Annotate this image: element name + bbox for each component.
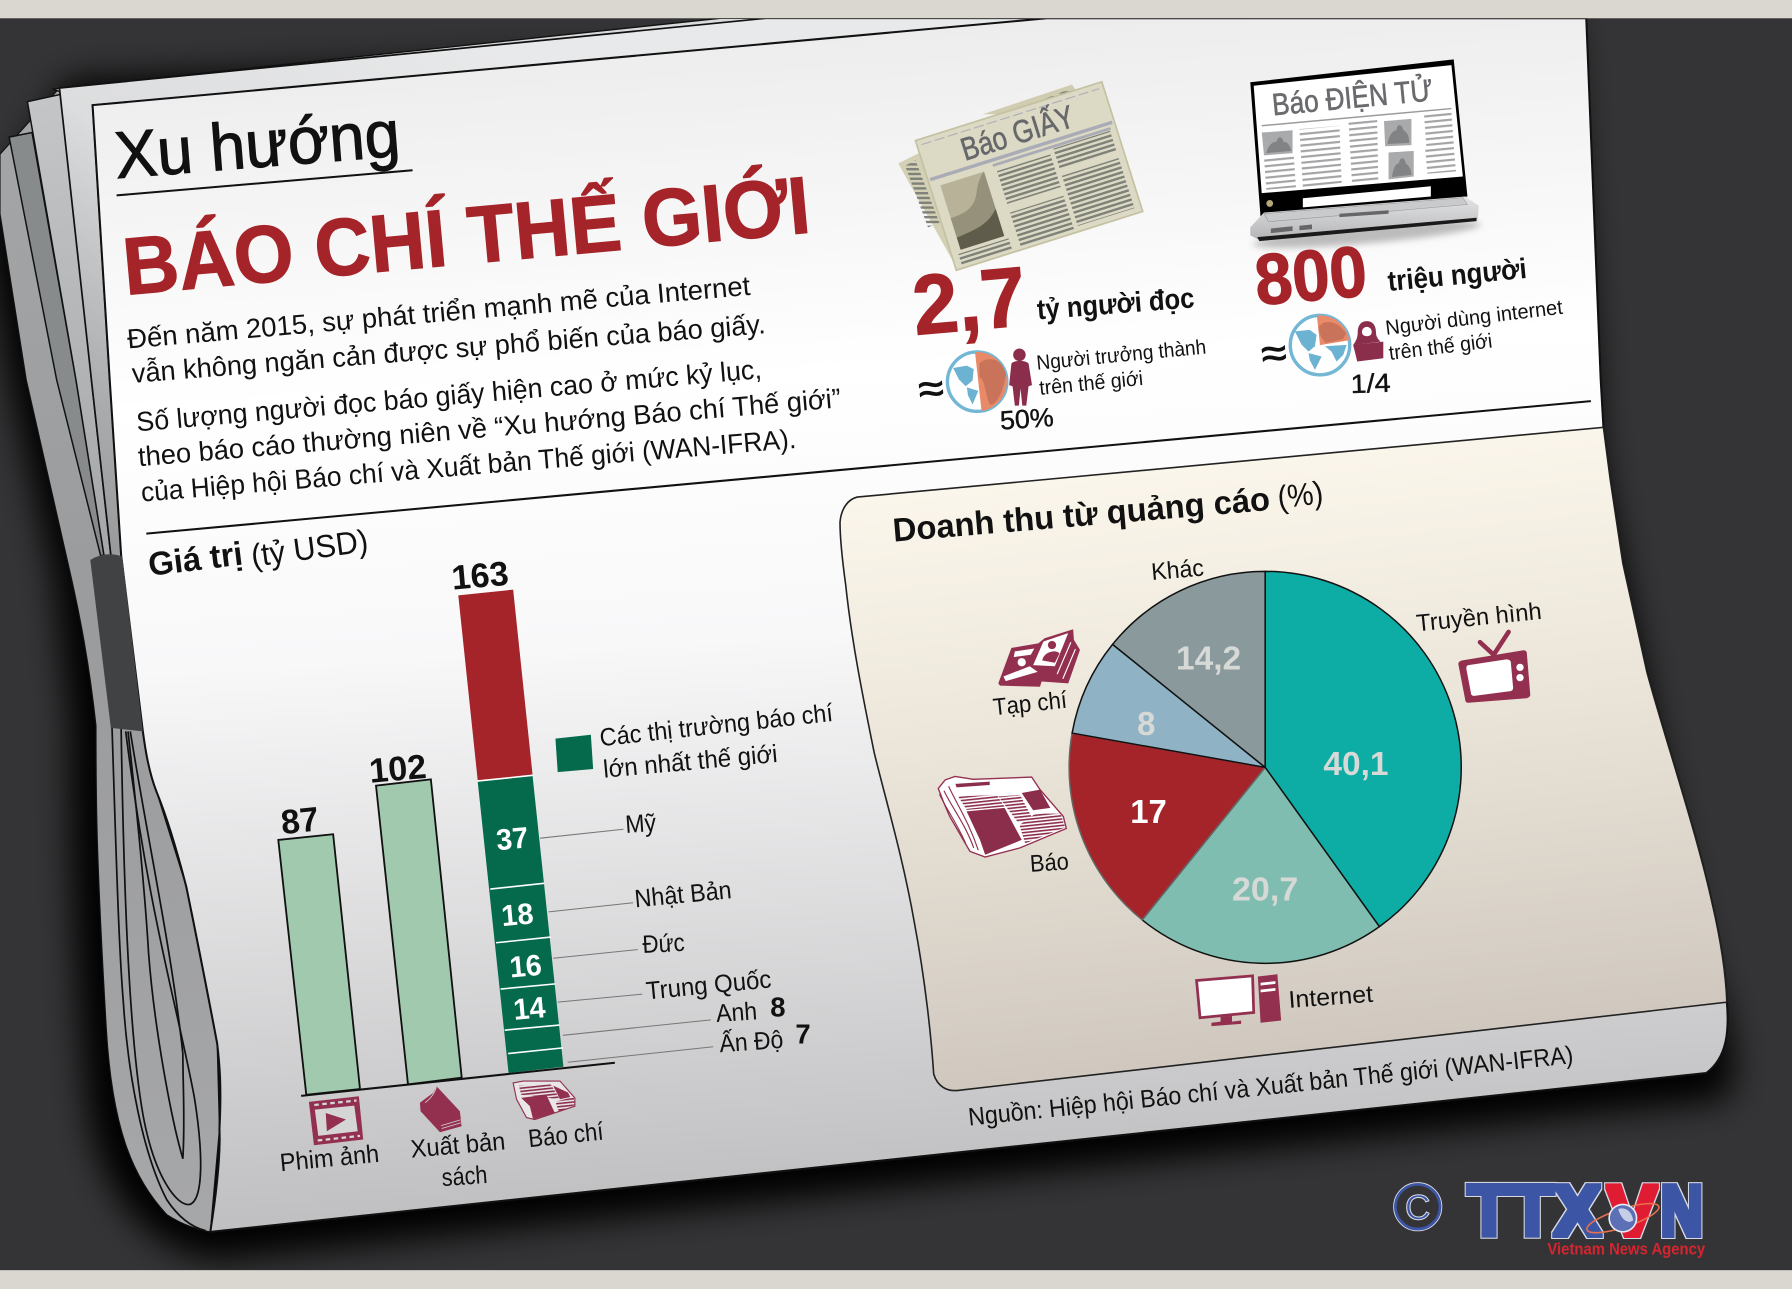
logo: copyright mark: [1394, 1183, 1442, 1231]
icon: book: [420, 1086, 462, 1132]
stat: print readers: ≈: [916, 364, 946, 414]
top band: [0, 0, 1792, 18]
icon: magazines: [998, 629, 1080, 687]
label: Báo GIẤY: Báo GIẤY: [956, 98, 1078, 168]
pie values: 20,7: [1232, 871, 1298, 908]
logo: TTXVN: Vietnam News Agency: [1547, 1240, 1706, 1259]
icon: woman at laptop: [1353, 321, 1383, 362]
icon: desktop computer: [1197, 974, 1281, 1026]
category labels: Phim ảnh: [279, 1140, 380, 1177]
stat: print readers: Người trưởng thành: [1035, 336, 1207, 375]
pie labels: Báo: [1029, 848, 1070, 878]
legend: Các thị trường báo chí: [598, 699, 834, 752]
pie chart: ad revenue: [891, 474, 1543, 1026]
bar: largest press markets: 18: [500, 897, 535, 933]
chart heading: (%): [1275, 474, 1325, 515]
slice: newspaper: [1069, 733, 1265, 920]
title: BÁO CHÍ THẾ GIỚI: BÁO CHÍ THẾ GIỚI: [119, 160, 814, 313]
sheet B: [9, 133, 104, 555]
chart heading: Doanh thu từ quảng cáo: [891, 481, 1271, 550]
bar value labels: 102: [368, 748, 428, 791]
intro text: Số lượng người đọc báo giấy hiện cao ở mức kỷ lục,: [135, 353, 763, 437]
legend: lớn nhất thế giới: [602, 740, 779, 784]
intro text: Đến năm 2015, sự phát triển mạnh mẽ của Internet: [126, 270, 752, 355]
source note: Nguồn: Hiệp hội Báo chí và Xuất bản Thế giới (WAN-IFRA): [967, 1041, 1575, 1132]
pie labels: Internet: [1288, 981, 1374, 1014]
logo: TTXVN: V: [1607, 1171, 1657, 1251]
stat: print readers: tỷ người đọc: [1036, 282, 1196, 326]
slice: other: [1113, 571, 1265, 767]
pie values: 14,2: [1176, 641, 1241, 678]
title block: [112, 97, 814, 313]
pie labels: Truyền hình: [1415, 598, 1543, 637]
icon: rolled newspaper: [938, 776, 1066, 857]
icon: adult person: [1009, 349, 1032, 406]
legend: [555, 699, 834, 784]
stat: online readers: ≈: [1259, 329, 1289, 379]
folded page lines: [112, 727, 206, 1231]
bar value labels: 163: [450, 555, 510, 598]
category labels: sách: [441, 1161, 488, 1192]
stat: online readers: trên thế giới: [1388, 329, 1494, 365]
category labels: [279, 1118, 605, 1192]
pie values: [1130, 641, 1389, 908]
sheet A: [27, 94, 111, 555]
stat: online readers: Người dùng internet: [1384, 296, 1564, 340]
stat: online readers: triệu người: [1386, 253, 1528, 298]
chart heading: Giá trị: [146, 536, 245, 584]
back sheets silhouette: [0, 88, 219, 1232]
logo: TTXVN: N: [1661, 1171, 1703, 1251]
stat: print readers: trên thế giới: [1038, 367, 1144, 400]
pie labels: Khác: [1150, 555, 1205, 586]
icon: laptop: [1250, 59, 1482, 253]
page margin: [59, 18, 1063, 558]
intro text: của Hiệp hội Báo chí và Xuất bản Thế giới (WAN-IFRA).: [140, 423, 797, 508]
bar value labels: [279, 555, 510, 842]
icon: film: [309, 1096, 363, 1145]
intro text: [126, 270, 842, 508]
slice: magazine: [1072, 644, 1265, 767]
icon: television: [1458, 632, 1530, 703]
stat: online readers: 800: [1252, 232, 1370, 321]
bar: book publishing: [376, 779, 462, 1084]
icon: globe quarter: [1290, 313, 1354, 375]
panel: ad revenue background: [840, 427, 1727, 1091]
bar value labels: 87: [279, 800, 321, 842]
rubber band: [90, 554, 143, 731]
market labels: Nhật Bản: [633, 876, 733, 913]
label: Báo ĐIỆN TỬ: Báo ĐIỆN TỬ: [1270, 71, 1434, 122]
pie labels: Tạp chí: [992, 687, 1069, 721]
pie values: 40,1: [1323, 746, 1389, 783]
icon: folded press: [513, 1081, 575, 1120]
chart heading: [146, 522, 370, 584]
market labels: Đức: [642, 929, 685, 959]
bar chart: value: [146, 522, 834, 1192]
stat: online readers: 1/4: [1350, 368, 1391, 399]
market labels: Mỹ: [624, 809, 657, 839]
title underline: [117, 170, 413, 195]
market labels: Ấn Độ: [718, 1025, 784, 1058]
bar: largest press markets: 16: [508, 949, 543, 984]
pie labels: [992, 555, 1543, 1014]
market leader lines: [540, 829, 713, 1062]
logo: TTXVN: TTX: [1467, 1171, 1601, 1251]
market labels: Anh: [715, 997, 758, 1028]
intro text: vẫn không ngăn cản được sự phổ biến của báo giấy.: [131, 308, 767, 389]
bar: largest press markets: 37: [495, 822, 530, 857]
slice: television: [1265, 571, 1461, 927]
slice: internet: [1142, 767, 1379, 963]
section divider: [146, 401, 1591, 534]
icon: printed newspaper: [898, 82, 1143, 270]
bottom band: [0, 1270, 1792, 1289]
bar: film: [278, 834, 360, 1095]
pie values: 8: [1137, 706, 1155, 743]
bar: press total: [458, 590, 533, 780]
logo: copyright mark: C: [1405, 1187, 1431, 1227]
title: Xu hướng: Xu hướng: [112, 97, 403, 193]
market labels: 8: [770, 991, 786, 1022]
stat: print readers: [914, 266, 1206, 430]
top sheet edge: [53, 18, 766, 91]
market labels: [624, 809, 811, 1058]
stat: online readers: [1256, 246, 1564, 394]
pie values: 17: [1130, 794, 1167, 831]
market labels: 7: [795, 1018, 811, 1049]
chart heading: (tỷ USD): [249, 522, 370, 574]
icon: globe half: [947, 351, 1011, 413]
stat: print readers: 50%: [999, 402, 1055, 436]
stat: print readers: 2,7: [909, 248, 1030, 353]
category labels: Báo chí: [527, 1118, 605, 1153]
logo: TTXVN: [1467, 1171, 1706, 1259]
bar: largest press markets: 14: [512, 991, 547, 1027]
bar: largest press markets: [477, 775, 563, 1073]
category labels: Xuất bản: [410, 1127, 506, 1164]
intro text: theo báo cáo thường niên về “Xu hướng Báo chí Thế giới”: [137, 382, 842, 472]
market labels: Trung Quốc: [645, 965, 773, 1006]
